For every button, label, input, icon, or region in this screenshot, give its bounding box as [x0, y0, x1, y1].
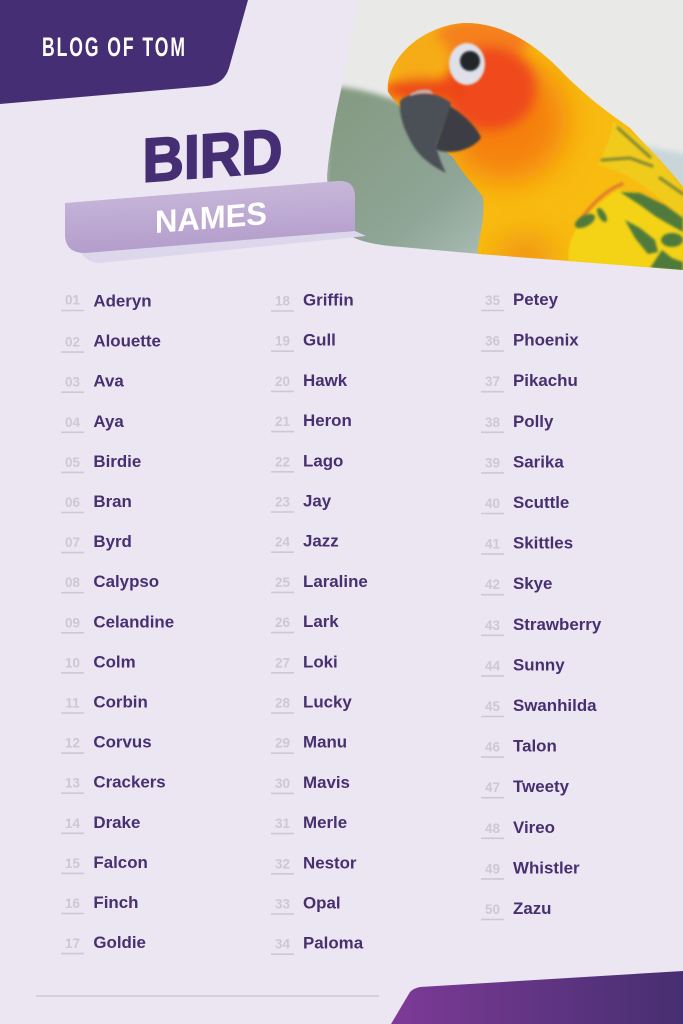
name 17: [61, 933, 146, 954]
name 15: 15: [65, 856, 80, 871]
name 44: [481, 655, 565, 676]
name 42: 42: [485, 577, 500, 592]
name 33: [271, 894, 341, 914]
name 08: [61, 572, 159, 593]
name 07: Byrd: [93, 532, 132, 551]
name 01: [61, 292, 152, 310]
name 16: Finch: [93, 893, 138, 912]
name 43: 43: [485, 618, 500, 633]
name 22: Lago: [303, 451, 343, 470]
name 49: 49: [485, 861, 500, 876]
name 14: [61, 813, 140, 833]
name 45: [481, 696, 597, 716]
name 01: Aderyn: [93, 292, 152, 310]
title: BIRD: BIRD: [142, 117, 282, 196]
name 31: Merle: [303, 813, 347, 832]
name 47: [481, 777, 570, 798]
name 49: [481, 858, 580, 879]
name 14: 14: [65, 816, 80, 831]
name 10: [61, 652, 136, 673]
name 24: Jazz: [303, 532, 339, 551]
name 24: 24: [275, 535, 290, 550]
name 20: Hawk: [303, 371, 348, 390]
chest orange glow: [443, 58, 567, 271]
name 36: [481, 331, 579, 351]
name 33: 33: [275, 896, 290, 912]
name 04: 04: [65, 415, 80, 430]
name 27: 27: [275, 655, 290, 670]
name 45: 45: [485, 699, 500, 714]
name 12: [61, 733, 152, 753]
name 32: 32: [275, 856, 290, 871]
name 04: Aya: [93, 412, 124, 431]
name 44: Sunny: [513, 655, 565, 674]
name 05: 05: [65, 455, 80, 470]
header banner: [0, 0, 248, 104]
name 32: Nestor: [303, 853, 357, 872]
name 23: Jay: [303, 492, 332, 510]
name 09: Celandine: [93, 612, 174, 631]
wing green markings: [573, 192, 683, 272]
name list column 1: [61, 292, 174, 954]
name 17: 17: [65, 936, 80, 951]
name 05: Birdie: [93, 452, 141, 471]
name 20: [271, 371, 348, 391]
eye ring: [449, 43, 485, 85]
name 18: Griffin: [303, 290, 354, 310]
name 02: 02: [65, 335, 80, 350]
name 14: Drake: [93, 813, 140, 832]
name 43: [481, 615, 602, 635]
name 44: 44: [485, 658, 500, 673]
name 12: 12: [65, 736, 80, 751]
name 02: Alouette: [93, 332, 161, 351]
name 23: 23: [275, 494, 290, 510]
name 48: Vireo: [513, 818, 555, 837]
name 13: 13: [65, 776, 80, 791]
name 50: Zazu: [513, 899, 551, 918]
name list column 2: [271, 290, 368, 954]
name 38: Polly: [513, 412, 554, 431]
name 40: 40: [485, 496, 500, 511]
name 19: Gull: [303, 331, 336, 350]
name 42: Skye: [513, 574, 552, 593]
name 29: Manu: [303, 733, 347, 752]
name list column 3: [481, 290, 602, 920]
name 48: [481, 818, 555, 838]
name 47: Tweety: [513, 777, 570, 796]
name 03: [61, 372, 124, 392]
name 45: Swanhilda: [513, 696, 597, 715]
name 06: [61, 492, 132, 512]
name 28: [271, 692, 352, 713]
name 46: 46: [485, 740, 500, 755]
name 29: [271, 733, 347, 753]
name 28: 28: [275, 696, 290, 710]
name 19: [271, 331, 336, 351]
name 16: [61, 893, 138, 914]
name 22: [271, 451, 343, 472]
lower beak: [434, 104, 481, 152]
name 29: 29: [275, 736, 290, 751]
name 32: [271, 853, 357, 874]
name 42: [481, 574, 552, 595]
name 24: [271, 532, 339, 552]
name 34: Paloma: [303, 934, 364, 953]
name 27: [271, 652, 338, 673]
name 08: 08: [65, 575, 80, 590]
name 50: [481, 899, 551, 920]
name 18: 18: [275, 294, 290, 308]
eye pupil: [460, 51, 480, 71]
name 41: 41: [485, 537, 500, 552]
name 49: Whistler: [513, 858, 580, 877]
name 09: [61, 612, 174, 633]
title: NAMES: NAMES: [155, 195, 267, 240]
name 15: [61, 853, 148, 873]
name 35: 35: [485, 293, 500, 308]
name 17: Goldie: [93, 933, 146, 952]
name 40: Scuttle: [513, 493, 569, 512]
name 33: Opal: [303, 894, 341, 912]
name 10: Colm: [93, 652, 136, 671]
name 28: Lucky: [303, 692, 352, 712]
name 31: 31: [275, 816, 290, 831]
name 35: [481, 290, 559, 310]
background sky patch: [646, 144, 683, 187]
name 47: 47: [485, 780, 500, 795]
name 30: [271, 773, 350, 793]
name 04: [61, 412, 124, 432]
name 07: 07: [65, 535, 80, 550]
name 09: 09: [65, 615, 80, 630]
name 16: 16: [65, 896, 80, 911]
name 36: Phoenix: [513, 331, 579, 350]
name 38: [481, 412, 554, 432]
name 26: Lark: [303, 612, 339, 631]
name 26: [271, 612, 339, 633]
name 41: [481, 534, 573, 554]
name 21: Heron: [303, 411, 352, 430]
ribbon shadow: [80, 231, 366, 263]
upper beak: [400, 93, 451, 173]
name 31: [271, 813, 347, 834]
name 46: Talon: [513, 737, 557, 756]
name 35: Petey: [513, 290, 559, 309]
name 30: Mavis: [303, 773, 350, 792]
name 13: Crackers: [93, 773, 166, 792]
name 13: [61, 773, 166, 793]
name 50: 50: [485, 902, 500, 917]
name 11: [61, 692, 148, 713]
name 21: [271, 411, 352, 432]
back green streaks: [602, 128, 683, 194]
head colouring: [381, 18, 536, 130]
ribbon: [65, 181, 355, 253]
name 07: [61, 532, 132, 553]
name 21: 21: [275, 414, 290, 429]
name 30: 30: [275, 776, 290, 791]
name 43: Strawberry: [513, 615, 602, 634]
name 26: 26: [275, 615, 290, 630]
name 06: 06: [65, 495, 80, 510]
name 39: [481, 452, 564, 473]
name 06: Bran: [93, 492, 132, 511]
wing orange edge: [582, 184, 622, 218]
name 37: Pikachu: [513, 371, 578, 390]
name 18: [271, 290, 354, 311]
name 27: Loki: [303, 652, 338, 671]
name 38: 38: [485, 415, 500, 430]
name 39: 39: [485, 455, 500, 470]
name 41: Skittles: [513, 534, 573, 553]
name 48: 48: [485, 821, 500, 836]
name 39: Sarika: [513, 452, 564, 471]
name 20: 20: [275, 374, 290, 389]
name 25: 25: [275, 575, 290, 590]
parrot body: [388, 23, 683, 270]
name 46: [481, 737, 557, 757]
upper back feathers: [598, 122, 683, 222]
name 40: [481, 493, 569, 514]
name 23: [271, 492, 332, 512]
name 37: [481, 371, 578, 392]
name 25: Laraline: [303, 572, 368, 591]
wing: [568, 190, 683, 270]
name 10: 10: [65, 655, 80, 670]
name 34: [271, 934, 364, 954]
footer banner: [391, 971, 683, 1024]
name 19: 19: [275, 334, 290, 349]
name 36: 36: [485, 334, 500, 349]
name 05: [61, 452, 141, 472]
name 11: Corbin: [93, 692, 148, 712]
name 03: Ava: [93, 372, 124, 391]
name 02: [61, 332, 161, 352]
beak cere: [410, 90, 434, 96]
name 15: Falcon: [93, 853, 148, 872]
name 03: 03: [65, 375, 80, 390]
name 37: 37: [485, 374, 500, 389]
name 25: [271, 572, 368, 592]
name 08: Calypso: [93, 572, 159, 591]
logo text: BLOG OF TOM: [42, 31, 187, 62]
name 01: 01: [65, 292, 80, 308]
name 12: Corvus: [93, 733, 152, 752]
name 22: 22: [275, 454, 290, 469]
photo: parrot: [320, 0, 683, 285]
name 11: 11: [65, 696, 80, 710]
name 34: 34: [275, 937, 290, 952]
background foliage: [327, 83, 528, 258]
